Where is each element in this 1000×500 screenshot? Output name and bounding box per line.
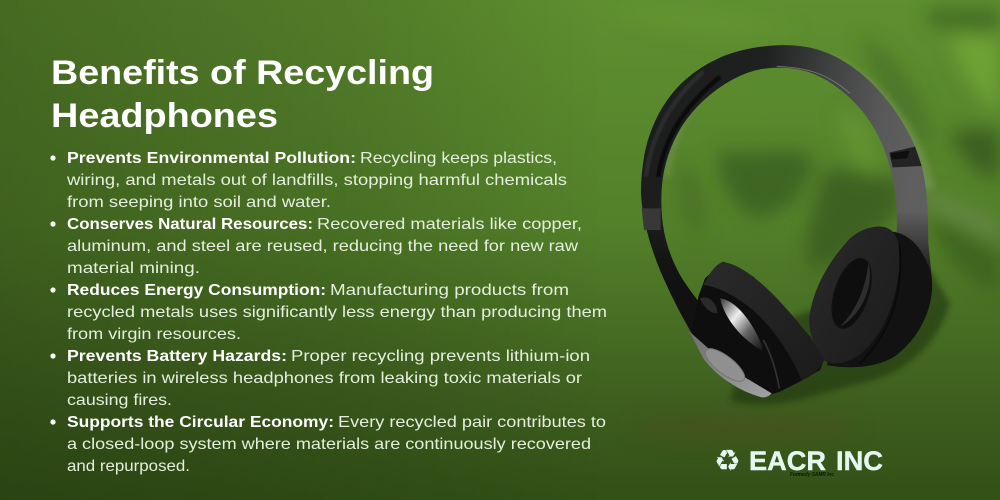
slider joint <box>889 147 922 167</box>
bullet: conserves natural resources <box>50 216 582 277</box>
bullet: prevents battery hazards: Proper recycling prevents lithium-ion <box>291 348 590 365</box>
bullet: prevents battery hazards: batteries in wireless headphones from leaking toxic materials or <box>67 370 583 387</box>
tagline: Formerly SAMR Inc <box>790 472 834 478</box>
bullet: supports the circular economy <box>50 414 606 475</box>
bullet: prevents environmental pollution: wiring, and metals out of landfills, stopping harmful chemicals <box>66 172 567 189</box>
bullet: conserves natural resources: material mining. <box>67 260 200 277</box>
bullet: prevents battery hazards: Prevents Battery Hazards: <box>67 348 287 365</box>
icon: recycle symbol: ♻ <box>714 444 741 479</box>
benefits list <box>50 150 607 475</box>
bullet: reduces energy consumption: Manufacturing products from <box>330 282 569 299</box>
cushion opening <box>825 254 879 333</box>
headphones glow and shadow <box>667 60 950 404</box>
glossy ring highlight <box>720 298 764 352</box>
bullet: supports the circular economy: Supports the Circular Economy: <box>67 414 334 431</box>
bullet: prevents battery hazards: causing fires. <box>67 392 172 409</box>
bullet: supports the circular economy: and repurposed. <box>67 458 190 475</box>
bullet: conserves natural resources: Conserves Natural Resources: <box>67 216 313 233</box>
left ear cushion <box>703 262 824 381</box>
hinge marking <box>642 208 661 230</box>
bullet: conserves natural resources: Recovered materials like copper, <box>317 216 582 233</box>
bullet: prevents environmental pollution: from seeping into soil and water. <box>67 194 331 211</box>
right ear cushion <box>809 227 900 363</box>
bullet: prevents environmental pollution: Prevents Environmental Pollution: <box>67 150 356 167</box>
bullet: conserves natural resources: aluminum, and steel are reused, reducing the need for new raw <box>67 238 578 255</box>
bullet: supports the circular economy: Every recycled pair contributes to <box>338 414 606 431</box>
wordmark <box>749 446 883 476</box>
bullet: reduces energy consumption: from virgin resources. <box>67 326 241 343</box>
title: Headphones <box>51 97 278 135</box>
title <box>51 54 434 135</box>
bullet: prevents battery hazards <box>50 348 590 409</box>
bullet: supports the circular economy: a closed-loop system where materials are continuously recovered <box>67 436 591 453</box>
right ear cup shell <box>827 232 932 367</box>
bullet: reduces energy consumption: Reduces Energy Consumption: <box>67 282 326 299</box>
bullet: reduces energy consumption <box>50 282 607 343</box>
bullet: prevents environmental pollution: Recycling keeps plastics, <box>360 150 557 167</box>
wordmark: INC <box>836 446 883 476</box>
bullet: prevents environmental pollution <box>50 150 567 211</box>
headphones illustration <box>641 45 950 404</box>
left ear cup <box>689 262 824 397</box>
left cup grey plate <box>689 332 772 397</box>
title: Benefits of Recycling <box>51 54 434 92</box>
wordmark: EACR <box>749 446 826 476</box>
logo: EACR INC <box>714 444 883 479</box>
bullet: reduces energy consumption: recycled metals uses significantly less energy than producing them <box>67 304 607 321</box>
headband <box>641 45 932 340</box>
ring seam <box>763 340 779 388</box>
